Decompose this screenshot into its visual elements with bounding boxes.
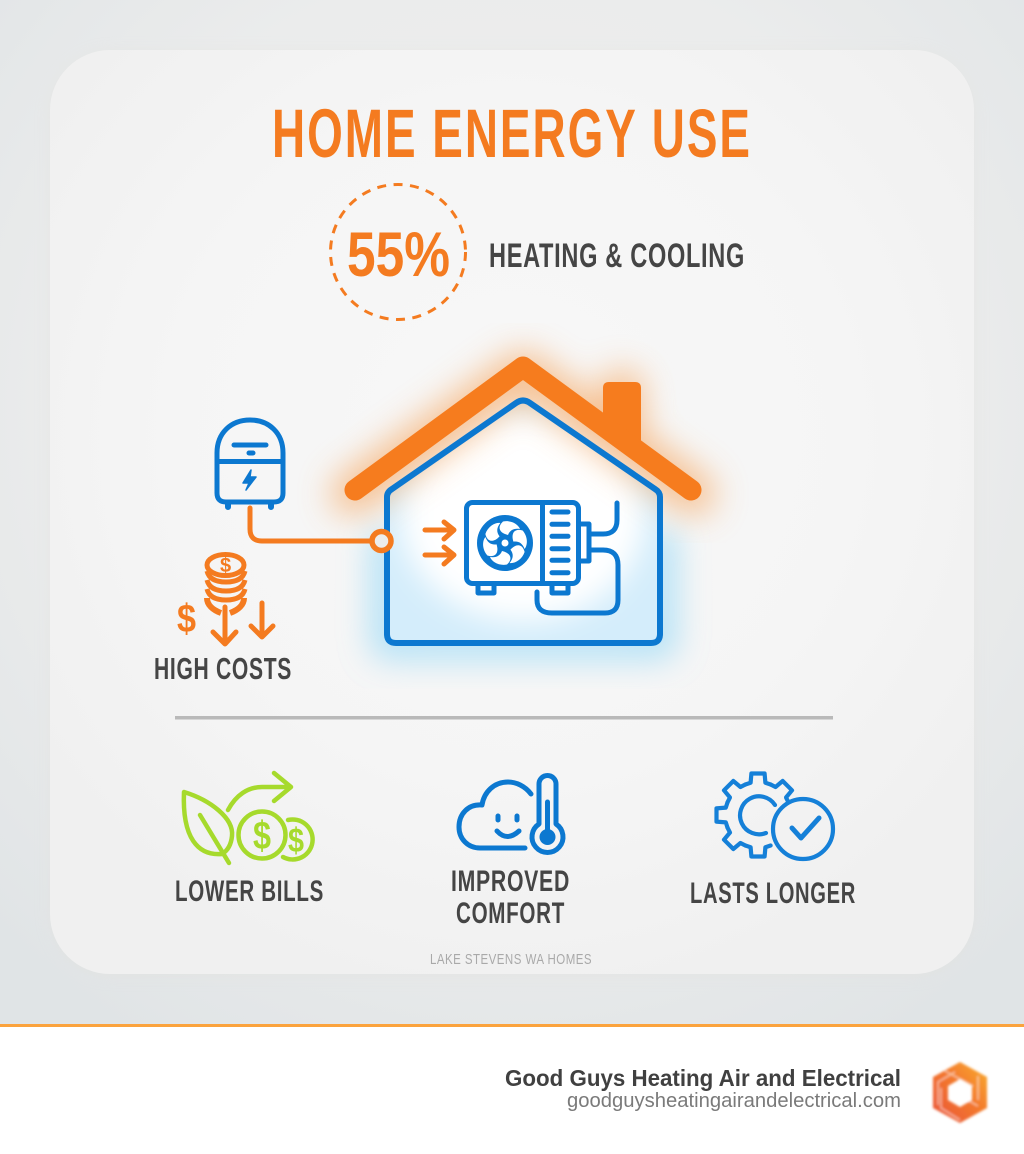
label: lasts longer: LASTS LONGER [690, 877, 856, 910]
power line [250, 508, 391, 550]
caption: location: LAKE STEVENS WA HOMES [430, 951, 592, 968]
title: HOME ENERGY USE [272, 95, 752, 172]
icon: outdoor power unit [217, 420, 283, 507]
house illustration [352, 367, 694, 650]
heading: heating and cooling: HEATING & COOLING [489, 237, 745, 275]
icon: high costs coins [177, 554, 273, 644]
blue glow [387, 530, 660, 643]
icon: comfort cloud and thermometer [459, 776, 563, 852]
label: high costs: HIGH COSTS [154, 651, 292, 686]
roof glow [352, 372, 694, 494]
icon: heat pump unit [466, 502, 618, 613]
footer: company name: Good Guys Heating Air and Electrical [505, 1065, 901, 1091]
house outline [387, 400, 660, 643]
icon: gear and check [716, 774, 833, 859]
label: improved comfort: COMFORT [456, 897, 565, 930]
footer: website: goodguysheatingairandelectrical.com [567, 1090, 901, 1112]
icon: lower bills [184, 773, 313, 863]
label: improved comfort [451, 865, 570, 930]
label: improved comfort: IMPROVED [451, 865, 570, 898]
icon: lower bills: $ [253, 814, 271, 858]
feet [478, 585, 568, 593]
stat: 55 percent: 55% [347, 220, 450, 290]
connector [580, 524, 589, 561]
label: lower bills: LOWER BILLS [175, 875, 324, 908]
roof [355, 367, 691, 490]
icon: lower bills: $ [288, 822, 304, 860]
panel: main card [50, 50, 974, 974]
coin dollar: $ [220, 555, 231, 577]
divider line [175, 716, 833, 720]
house interior [390, 404, 657, 640]
arrows into unit [425, 522, 454, 564]
footer band [0, 1024, 1024, 1154]
logo [933, 1062, 987, 1123]
stat: 55 percent [330, 184, 466, 320]
fan [477, 515, 533, 571]
vent slats [552, 512, 568, 573]
large dollar: $ [177, 597, 196, 641]
panel shadow [50, 52, 974, 976]
down arrows [213, 603, 273, 644]
chimney [603, 382, 641, 460]
pipes [590, 503, 617, 534]
